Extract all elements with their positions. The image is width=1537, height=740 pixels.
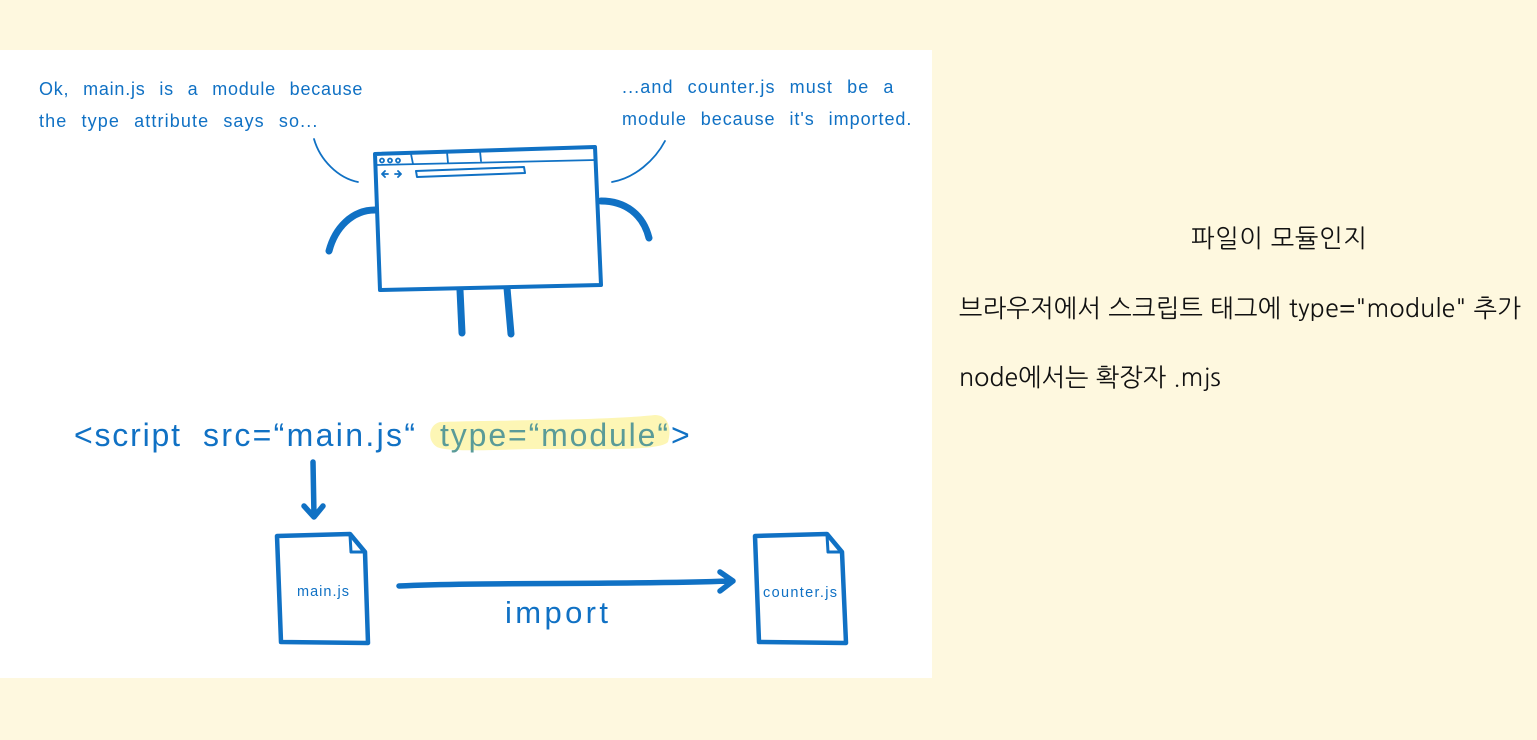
arrow: script to main.js bbox=[304, 462, 323, 517]
heading: 파일이 모듈인지 bbox=[1191, 226, 1367, 251]
caption right: module because it's imported. bbox=[622, 109, 912, 129]
panel: illustration bbox=[0, 50, 932, 678]
caption right: ...and counter.js must be a bbox=[622, 77, 894, 97]
file: main.js: main.js bbox=[297, 584, 349, 600]
file: counter.js: counter.js bbox=[763, 585, 837, 601]
code line: > bbox=[671, 417, 690, 453]
code line: <script bbox=[74, 417, 180, 453]
code line: src=“main.js“ bbox=[203, 417, 415, 453]
tab bar bbox=[375, 151, 596, 165]
speech line left bbox=[314, 139, 358, 182]
window body bbox=[375, 147, 601, 290]
speech line right bbox=[612, 141, 665, 182]
caption left bbox=[39, 79, 363, 131]
caption right bbox=[622, 77, 912, 129]
arm left bbox=[329, 210, 375, 251]
browser character bbox=[329, 147, 649, 334]
caption left: the type attribute says so... bbox=[39, 111, 318, 131]
legs bbox=[460, 288, 511, 334]
address bar bbox=[416, 167, 525, 177]
file: main.js bbox=[277, 534, 368, 643]
caption left: Ok, main.js is a module because bbox=[39, 79, 363, 99]
highlight bbox=[430, 415, 669, 450]
arm right bbox=[601, 201, 649, 238]
code line: type=“module“ bbox=[440, 417, 668, 453]
arrow: import: import bbox=[505, 595, 608, 630]
code line bbox=[74, 415, 690, 453]
navigation arrows bbox=[382, 171, 401, 177]
arrow: import bbox=[399, 572, 733, 630]
text: browser: 브라우저에서 스크립트 태그에 type="module" 추가 bbox=[959, 296, 1521, 321]
file: counter.js bbox=[755, 534, 846, 643]
text: node: node에서는 확장자 .mjs bbox=[959, 365, 1221, 390]
